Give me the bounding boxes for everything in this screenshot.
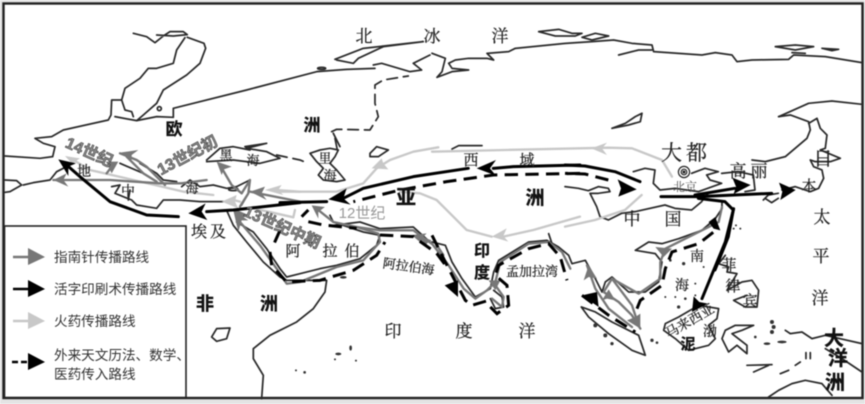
sea and region labels: 域 bbox=[519, 152, 535, 169]
continent labels: 洋 bbox=[828, 347, 848, 370]
place labels: 大都 bbox=[661, 141, 711, 165]
place labels: 国 bbox=[664, 210, 682, 229]
legend: movable-type route: 活字印刷术传播路线 bbox=[54, 282, 177, 297]
place labels: 本 bbox=[801, 178, 817, 195]
continent labels: 洲 bbox=[304, 116, 320, 135]
ocean labels: 印 bbox=[384, 322, 402, 341]
date labels on routes: 12世纪 bbox=[339, 205, 385, 222]
continent labels: 洲 bbox=[525, 188, 545, 209]
compass route (grey) bbox=[53, 150, 722, 329]
ocean labels: 度 bbox=[456, 322, 472, 341]
foreign astronomy, math and medicine route (dashed black) bbox=[270, 173, 720, 332]
sea and region labels: 海 bbox=[323, 168, 337, 183]
date labels on routes: 13世纪初 bbox=[154, 131, 221, 179]
legend: movable-type route bbox=[13, 280, 177, 297]
continent labels: 非 bbox=[196, 294, 214, 314]
ocean labels: 冰 bbox=[424, 27, 440, 46]
sea and region labels: 地 bbox=[77, 163, 91, 180]
place labels: 泥 bbox=[680, 336, 696, 353]
legend: foreign learning route: 外来天文历法、数学、 bbox=[54, 348, 190, 363]
ocean labels: 洋 bbox=[812, 289, 828, 308]
legend panel bbox=[4, 226, 190, 398]
sea and region labels: 伯 bbox=[344, 243, 360, 260]
sea and region labels: 里 bbox=[318, 151, 332, 166]
legend: compass route bbox=[13, 248, 150, 265]
place labels: 丽 bbox=[750, 162, 768, 181]
continent labels: 欧 bbox=[166, 119, 182, 139]
place labels: 高 bbox=[730, 162, 746, 181]
continent labels: 洲 bbox=[825, 372, 845, 394]
icon: Beijing capital marker bbox=[678, 166, 690, 178]
place labels: 印 bbox=[474, 242, 490, 260]
place labels: 律 bbox=[725, 278, 741, 295]
sea and region labels: 阿 bbox=[285, 243, 301, 260]
place labels: 宾 bbox=[742, 293, 758, 310]
ocean labels: 太 bbox=[814, 208, 830, 227]
gunpowder route (light grey) bbox=[65, 143, 672, 242]
sea and region labels: 拉 bbox=[322, 243, 338, 260]
continent labels: 亚 bbox=[396, 187, 416, 209]
place labels: 菲 bbox=[721, 257, 737, 274]
place labels: 中 bbox=[624, 210, 640, 229]
legend: gunpowder route bbox=[13, 312, 136, 329]
place labels: 北京 bbox=[673, 179, 697, 194]
date labels on routes bbox=[63, 131, 385, 252]
place labels: 埃及 bbox=[191, 223, 229, 241]
movable-type printing route (solid black) bbox=[58, 159, 796, 312]
date labels on routes: 14世纪 bbox=[63, 133, 116, 171]
legend: gunpowder route: 火药传播路线 bbox=[54, 314, 136, 329]
sea and region labels: 黑 bbox=[219, 148, 233, 163]
ocean labels: 北 bbox=[356, 27, 372, 46]
legend: compass route: 指南针传播路线 bbox=[54, 250, 150, 265]
ocean labels: 洋 bbox=[492, 27, 508, 46]
ocean labels bbox=[356, 27, 830, 341]
sea and region labels: 海 bbox=[675, 278, 689, 294]
place labels: 日 bbox=[813, 149, 833, 170]
sea and region labels: 阿拉伯海 bbox=[382, 255, 435, 278]
sea and region labels: 南 bbox=[690, 248, 704, 265]
sea and region labels: 孟加拉湾 bbox=[506, 264, 558, 279]
ocean labels: 洋 bbox=[518, 322, 536, 341]
continent labels bbox=[166, 116, 848, 394]
sea and region labels: 海 bbox=[185, 181, 199, 196]
legend: foreign learning route bbox=[12, 348, 190, 382]
legend: foreign learning route: 医药传入路线 bbox=[54, 367, 136, 382]
date labels on routes: 13世纪中期 bbox=[241, 202, 323, 252]
sea and region labels bbox=[77, 148, 704, 294]
sea and region labels: 海 bbox=[246, 153, 260, 168]
sea and region labels: 西 bbox=[463, 152, 479, 169]
ocean labels: 平 bbox=[812, 247, 830, 266]
sea and region labels: 中 bbox=[121, 183, 135, 200]
place labels: 渤 bbox=[703, 323, 717, 340]
continent labels: 大 bbox=[824, 327, 844, 350]
place labels bbox=[191, 141, 833, 353]
continent labels: 洲 bbox=[260, 294, 278, 314]
place labels: 马来西亚 bbox=[662, 300, 717, 341]
place labels: 度 bbox=[474, 263, 490, 282]
